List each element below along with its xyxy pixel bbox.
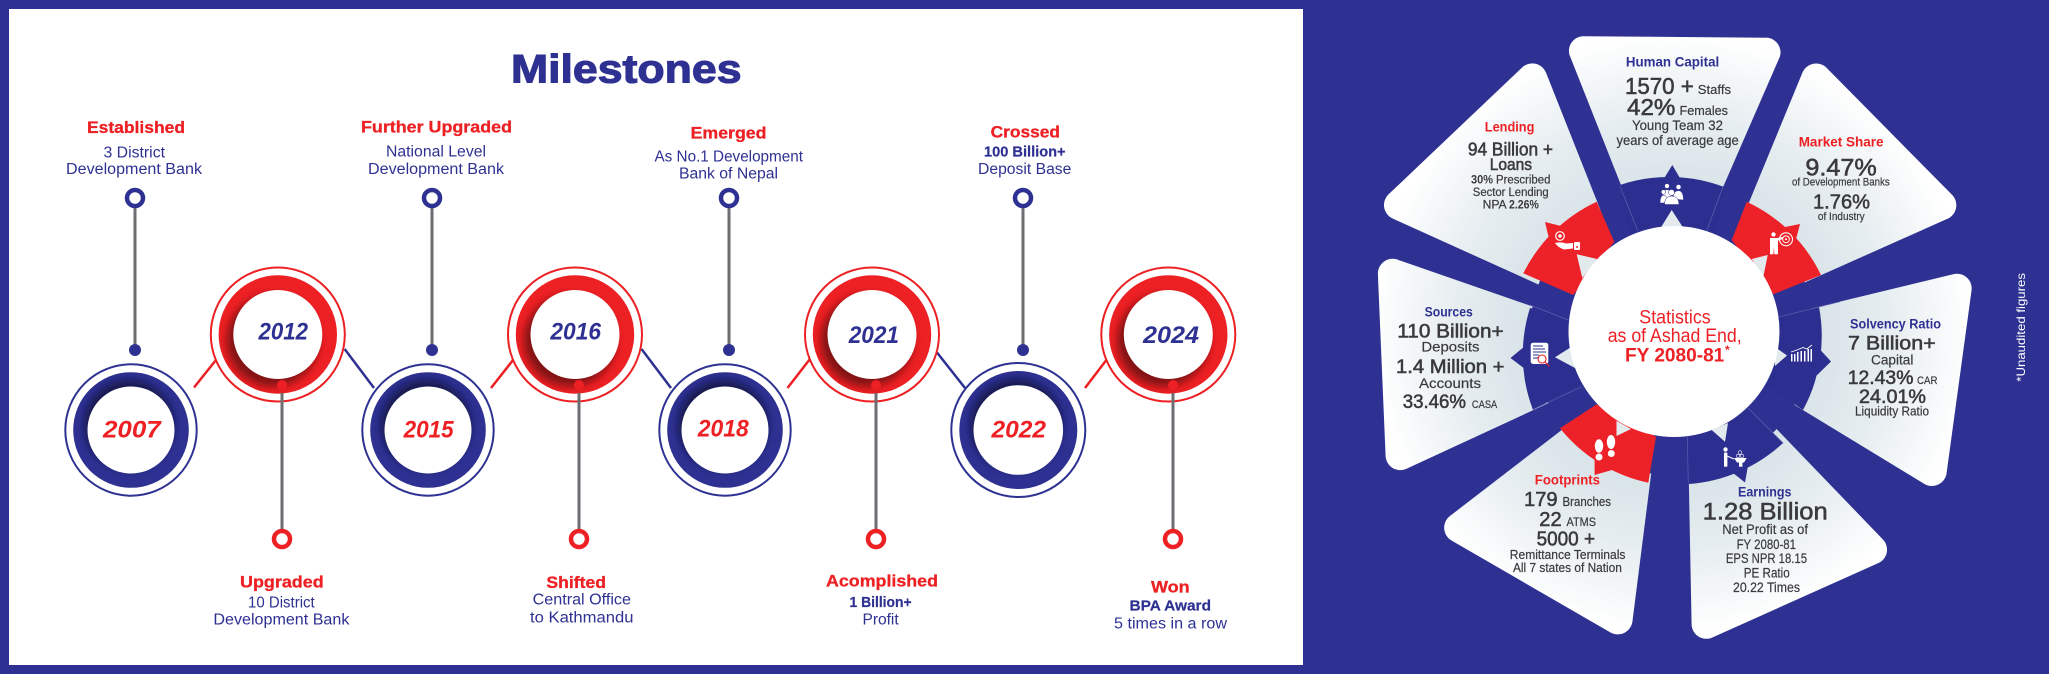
text: Further Upgraded: Further Upgraded	[361, 117, 512, 136]
pin 2012	[274, 380, 290, 547]
petal: solvency ratio	[1686, 274, 1972, 486]
stats: market share: 1.76%	[1813, 192, 1870, 214]
stats: sources: 110 Billion+	[1397, 321, 1504, 342]
stats: lending: Lending	[1485, 120, 1534, 135]
center text: FY 2080-81	[1625, 346, 1725, 367]
stats: human capital	[1616, 55, 1739, 148]
icon: man with target	[1770, 232, 1792, 254]
pin 2007	[127, 190, 143, 356]
text: Established: 3 District	[104, 144, 166, 161]
text: Shifted: to Kathmandu	[530, 610, 634, 626]
pin 2022	[1015, 190, 1031, 356]
text: Upgraded: Upgraded	[240, 572, 324, 592]
inner notches	[1555, 210, 1787, 442]
year circle 2012: 2012	[258, 319, 309, 346]
ring sector: market share	[1732, 202, 1821, 294]
stats: lending: 2.26%	[1509, 199, 1539, 211]
connector: 2015 to 2016	[491, 352, 519, 388]
text: Emerged: Bank of Nepal	[679, 165, 778, 182]
stats: human capital: years of average age	[1616, 133, 1739, 148]
connector: 2012 to 2015	[345, 349, 374, 388]
milestone 2021	[805, 268, 939, 629]
petal: market share	[1696, 63, 1956, 331]
year circle 2022	[951, 363, 1085, 497]
stats: sources: Sources	[1425, 305, 1473, 320]
text: Acomplished: 1 Billion+	[850, 594, 912, 611]
text: Crossed: 100 Billion+	[984, 144, 1066, 160]
stats: earnings: 1.28 Billion	[1703, 499, 1828, 526]
pin 2021	[868, 380, 884, 547]
year circle 2007: 2007	[102, 417, 162, 444]
stats: footprints: Remittance Terminals	[1510, 548, 1625, 562]
text: Further Upgraded: Development Bank	[368, 161, 504, 178]
milestone 2007	[65, 118, 202, 496]
stats: footprints: 179	[1524, 489, 1558, 511]
center text	[1608, 307, 1742, 367]
stats: solvency ratio: Capital	[1871, 352, 1913, 368]
stats: market share	[1792, 135, 1890, 223]
text: Acomplished: Profit	[862, 612, 899, 629]
text: Shifted	[530, 573, 634, 626]
stats: footprints: Branches	[1562, 495, 1611, 509]
text: Shifted: Central Office	[533, 592, 631, 608]
stats: market share: 9.47%	[1805, 155, 1877, 182]
milestone 2024	[1101, 268, 1235, 632]
year circle 2012	[211, 268, 345, 402]
title: Milestones	[511, 48, 742, 92]
text: Further Upgraded: National Level	[386, 144, 486, 160]
petal: human capital	[1569, 36, 1781, 309]
stats: footprints: All 7 states of Nation	[1513, 561, 1622, 575]
text: Won: BPA Award	[1130, 598, 1211, 614]
icon: man with wheelbarrow	[1723, 447, 1747, 467]
year circle 2024: 2024	[1142, 322, 1199, 349]
stats: market share: of Development Banks	[1792, 177, 1890, 189]
ring base	[1530, 191, 1814, 475]
stats: earnings: PE Ratio	[1744, 566, 1790, 581]
icon: growth chart	[1791, 345, 1812, 362]
text: Acomplished	[826, 571, 938, 629]
panel: milestones	[9, 9, 1303, 665]
stats: human capital: Staffs	[1698, 82, 1731, 97]
stats: lending: 30%	[1471, 174, 1493, 186]
stats: lending: Loans	[1490, 155, 1532, 174]
pin 2015	[424, 190, 440, 356]
petal: lending	[1384, 63, 1650, 335]
text: Established	[66, 118, 202, 178]
milestone 2012	[211, 268, 350, 629]
ring pointers	[1510, 165, 1831, 482]
text: Crossed	[978, 123, 1071, 178]
milestone 2022	[951, 123, 1085, 497]
stats: human capital: Young Team 32	[1632, 118, 1723, 133]
icon: people	[1660, 184, 1684, 204]
year circle 2018: 2018	[697, 415, 749, 442]
stats: earnings: 20.22 Times	[1733, 580, 1800, 595]
pin 2016	[571, 380, 587, 547]
milestone 2016	[508, 268, 642, 626]
stats: solvency ratio: Liquidity Ratio	[1855, 405, 1929, 419]
stats: solvency ratio	[1848, 316, 1941, 419]
stats: lending: 94 Billion +	[1468, 139, 1553, 159]
stats: footprints: Footprints	[1535, 473, 1600, 488]
stats: footprints: 5000 +	[1537, 528, 1595, 550]
year circle 2018	[659, 364, 791, 496]
year circle 2007	[65, 364, 197, 496]
ring sector: solvency	[1700, 307, 1822, 410]
year circle 2021: 2021	[848, 322, 899, 349]
stats: footprints	[1510, 473, 1625, 575]
icon: footprints	[1595, 435, 1615, 460]
stats: earnings: Earnings	[1738, 485, 1792, 500]
stats: market share: of Industry	[1818, 211, 1865, 223]
text: Emerged: As No.1 Development	[654, 149, 804, 166]
text: Further Upgraded	[361, 117, 512, 178]
stats: earnings: EPS NPR 18.15	[1726, 551, 1807, 566]
text: Upgraded: 10 District	[248, 594, 315, 612]
stats: lending: Sector Lending	[1473, 187, 1549, 199]
stats: sources	[1396, 305, 1504, 413]
stats: lending: NPA	[1483, 199, 1507, 211]
connector: 2016 to 2018	[642, 349, 671, 388]
stats: footprints: 22	[1539, 509, 1562, 531]
petal: earnings	[1686, 335, 1887, 639]
ring sector: footprints	[1560, 404, 1656, 483]
stats: solvency ratio: Solvency Ratio	[1850, 316, 1941, 331]
connector: 2018 to 2021	[788, 352, 815, 388]
milestone 2018	[654, 123, 804, 496]
stats: solvency ratio: CAR	[1917, 375, 1938, 387]
text: Upgraded	[213, 572, 350, 629]
text: Emerged: Emerged	[691, 123, 766, 142]
year circle 2016	[508, 268, 642, 402]
icon: hand with coin	[1555, 232, 1580, 250]
stats: earnings: Net Profit as of	[1722, 522, 1808, 537]
pin 2018	[721, 190, 737, 356]
center text: *	[1725, 343, 1730, 357]
footnote: unaudited figures: *Unaudited figures	[2014, 273, 2028, 382]
stats: footprints: ATMS	[1566, 515, 1596, 529]
stats: human capital: 1570 +	[1625, 73, 1694, 99]
text: Crossed: Deposit Base	[978, 161, 1071, 178]
stats: earnings: FY 2080-81	[1737, 537, 1796, 552]
center circle	[1568, 226, 1780, 437]
text: Won	[1114, 577, 1228, 632]
text: Crossed: Crossed	[991, 123, 1060, 142]
stats: sources: 1.4 Million +	[1396, 357, 1504, 378]
ring sector: human capital	[1620, 177, 1724, 330]
text: Upgraded: Development Bank	[213, 612, 350, 629]
stats: human capital: Females	[1680, 103, 1728, 118]
ring sector: earnings	[1680, 340, 1783, 484]
year circle 2022: 2022	[990, 417, 1047, 444]
stats: solvency ratio: 12.43%	[1848, 368, 1913, 389]
petal: footprints	[1444, 349, 1667, 634]
stats: sources: Accounts	[1419, 375, 1481, 391]
center text: Statistics	[1639, 307, 1711, 328]
stats: market share: Market Share	[1799, 135, 1884, 150]
text: Established: Development Bank	[66, 161, 202, 178]
pin 2024	[1165, 380, 1181, 547]
year circle 2015	[362, 364, 494, 496]
stats: human capital: Human Capital	[1626, 55, 1719, 70]
stats: sources: CASA	[1472, 399, 1498, 411]
year circle 2024	[1101, 268, 1235, 402]
year circle 2021	[805, 268, 939, 402]
icon: document with magnifier	[1531, 343, 1550, 366]
stats: solvency ratio: 24.01%	[1859, 387, 1926, 408]
text: Established: Established	[87, 118, 185, 137]
year circle 2015: 2015	[403, 417, 454, 444]
center text: as of Ashad End,	[1608, 326, 1742, 347]
connector: 2007 to 2012	[194, 352, 222, 388]
connector: 2021 to 2022	[937, 352, 965, 388]
text: Emerged	[654, 123, 804, 182]
panel: statistics wheel	[1378, 36, 2028, 639]
stats: solvency ratio: 7 Billion+	[1848, 334, 1936, 355]
ring sector: lending	[1523, 202, 1614, 295]
stats: lending	[1468, 120, 1553, 211]
ring sector: sources	[1523, 308, 1660, 410]
text: Won: Won	[1151, 577, 1190, 596]
text: Shifted: Shifted	[546, 573, 606, 592]
stats: earnings	[1703, 485, 1828, 595]
year circle 2016: 2016	[549, 319, 602, 346]
stats: human capital: 42%	[1627, 94, 1675, 120]
connector: 2022 to 2024	[1085, 352, 1112, 388]
stats: sources: 33.46%	[1403, 392, 1466, 413]
text: Won: 5 times in a row	[1114, 616, 1228, 632]
stats: sources: Deposits	[1421, 338, 1480, 354]
petal: sources	[1378, 259, 1661, 470]
text: Acomplished: Acomplished	[826, 571, 938, 590]
stats: lending: Prescribed	[1496, 174, 1550, 186]
milestone 2015	[361, 117, 512, 496]
